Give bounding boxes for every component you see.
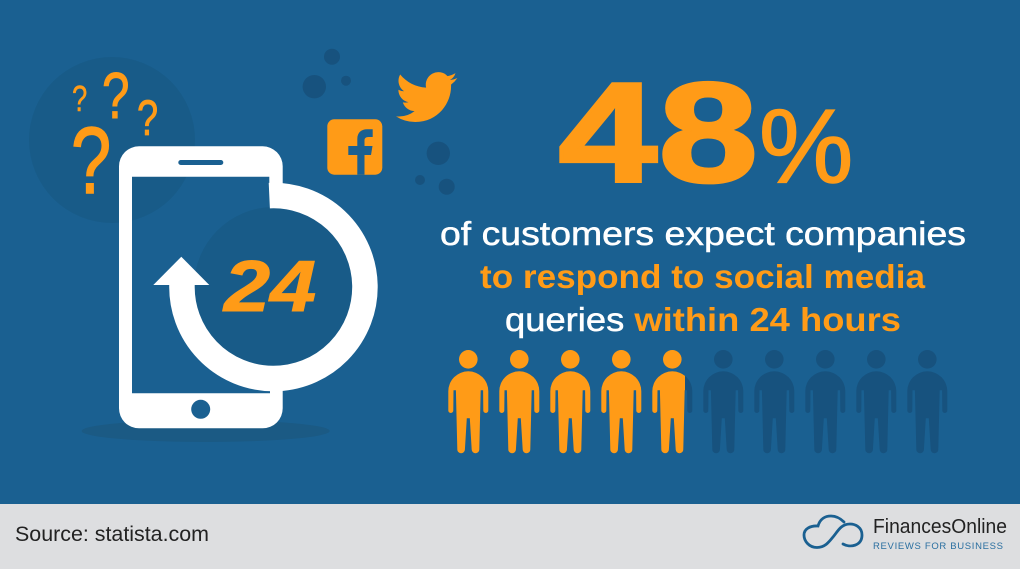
logo: FinancesOnline: REVIEWS FOR BUSINESS: [873, 541, 1003, 552]
source text: Source: statista.com: [15, 523, 209, 546]
icon: question marks: ?: [102, 61, 129, 133]
statistic description: of customers expect companies: [440, 215, 966, 252]
social bubbles: [303, 49, 455, 195]
logo: FinancesOnline: [804, 515, 1007, 552]
people pictogram: 5 of 10 highlighted: [448, 350, 947, 453]
statistic description: [440, 215, 966, 338]
footer bar: [0, 504, 1020, 569]
icon: twitter bird: [396, 72, 457, 122]
icon: question marks: ?: [137, 91, 158, 146]
icon: question marks: ?: [72, 78, 87, 119]
headline stat: 4: [558, 53, 657, 212]
icon: phone with 24 hour arrow: [119, 146, 365, 428]
icon: phone with 24 hour arrow: 24: [222, 247, 316, 327]
logo: FinancesOnline: FinancesOnline: [873, 515, 1007, 538]
statistic description: to respond to social media: [480, 258, 926, 295]
statistic description: queries within 24 hours: [505, 301, 901, 338]
headline stat: %: [759, 88, 853, 205]
phone shadow: [82, 420, 330, 442]
icon: question marks: [29, 57, 195, 223]
headline stat: [558, 53, 853, 212]
headline stat: 8: [658, 54, 758, 212]
icon: question marks: ?: [71, 107, 111, 213]
icon: facebook: [327, 119, 382, 175]
